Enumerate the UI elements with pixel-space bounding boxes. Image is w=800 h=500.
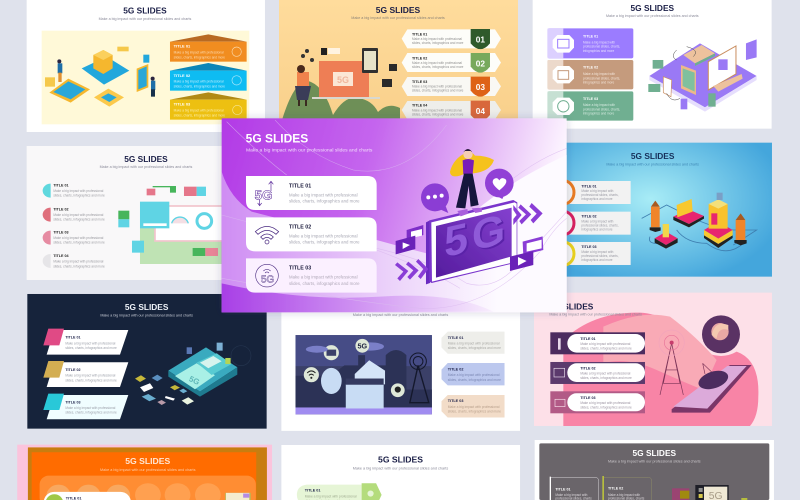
rows: TITLE 02 bbox=[65, 368, 81, 372]
illustration: isometric 5G device: 5G bbox=[187, 374, 201, 387]
heading: 5G SLIDES bbox=[124, 154, 168, 164]
rows: infographics and more bbox=[581, 197, 613, 201]
rows: professional slides, charts, bbox=[581, 193, 619, 197]
rows: Make a big impact with professional bbox=[580, 371, 631, 375]
panel: pink slide right: Make a big impact with our professional slides and charts bbox=[549, 312, 642, 316]
rows: slides, charts, infographics and more bbox=[580, 376, 632, 380]
night scene illustration: 5G bbox=[357, 342, 368, 351]
card: title 03 bbox=[246, 258, 377, 293]
rows: Make a big impact with bbox=[583, 72, 615, 76]
rows: infographics and more bbox=[581, 258, 613, 262]
card: title 01 bbox=[246, 176, 377, 210]
rows: slides, charts, infographics and more bbox=[65, 378, 117, 382]
rows: TITLE 03 bbox=[581, 245, 597, 249]
rows: TITLE 03 bbox=[583, 97, 598, 101]
icon: video player right bbox=[510, 236, 543, 271]
icon: 5G antenna: 5G bbox=[255, 188, 272, 203]
rows: Make a big impact with professional bbox=[65, 406, 116, 410]
rows: professional slides, charts, bbox=[581, 254, 619, 258]
illustration: isometric laptop bbox=[648, 39, 757, 112]
rows: TITLE 03 bbox=[448, 399, 463, 403]
row: TITLE 01 bbox=[305, 488, 320, 492]
card: title 03: Make a big impact with professional bbox=[289, 274, 358, 279]
hills bbox=[282, 81, 400, 120]
rows: slides, charts, infographics and more bbox=[412, 113, 464, 117]
heading: SLIDES bbox=[563, 302, 594, 312]
panel: dark slide left bbox=[27, 294, 267, 429]
rows: Make a big impact with bbox=[608, 493, 640, 497]
rows: Make a big impact with professional bbox=[448, 341, 500, 345]
panel: pink slide right bbox=[534, 293, 772, 426]
illustration: isometric city bbox=[642, 193, 757, 251]
rows: Make a big impact with professional bbox=[580, 342, 631, 346]
rows: Make a big impact with professional bbox=[412, 61, 462, 65]
rows: Make a big impact with bbox=[583, 40, 615, 44]
panel: grey slide bottom right bbox=[535, 440, 774, 500]
illustration: tablet 5G bbox=[672, 485, 747, 500]
arrow cards: TITLE 02 bbox=[174, 73, 191, 78]
panel: orange slide bottom left: Make a big impact with our professional slides and charts bbox=[100, 468, 196, 472]
lower swoosh bbox=[222, 155, 567, 312]
rows: Make a big impact with professional bbox=[448, 373, 500, 377]
rows bbox=[550, 332, 645, 413]
rows: TITLE 02 bbox=[53, 208, 69, 212]
rows: Make a big impact with professional bbox=[580, 401, 631, 405]
icon: wifi bbox=[255, 226, 279, 244]
rows: Make a big impact with professional bbox=[412, 109, 462, 113]
panel: white slide middle left: Make a big impact with our professional slides and charts bbox=[100, 165, 192, 169]
arrow cards: Make a big impact with professional bbox=[174, 50, 224, 54]
arrow cards: Make a big impact with professional bbox=[174, 109, 224, 113]
rows: slides, charts, infographics and more bbox=[412, 89, 464, 93]
icon: video player left bbox=[396, 225, 423, 254]
rows: infographics and more bbox=[583, 112, 614, 116]
rows: slides, charts, infographics and more bbox=[65, 411, 117, 415]
rows: TITLE 02 bbox=[448, 368, 463, 372]
rows bbox=[442, 332, 505, 417]
card: title 03: slides, charts, infographics and more bbox=[289, 281, 360, 286]
rows: TITLE 04 bbox=[412, 104, 428, 108]
rows: TITLE 02 bbox=[608, 487, 623, 491]
heading: 5G SLIDES bbox=[631, 3, 674, 13]
rows: TITLE 01 bbox=[555, 487, 571, 491]
arrow cards: TITLE 03 bbox=[174, 102, 191, 107]
laptop illustration: 5G bbox=[337, 75, 349, 85]
rows: professional slides, charts, bbox=[581, 223, 619, 227]
row: Make a big impact with professional bbox=[305, 494, 357, 498]
arrow cards: TITLE 01 bbox=[174, 44, 191, 49]
rows: Make a big impact with professional bbox=[65, 341, 116, 345]
rows bbox=[43, 184, 105, 268]
rows: infographics and more bbox=[583, 81, 614, 85]
rows bbox=[43, 329, 128, 419]
heading: 5G SLIDES bbox=[631, 151, 675, 161]
rows: slides, charts, infographics and more bbox=[448, 378, 501, 382]
rows: TITLE 02 bbox=[583, 66, 598, 70]
rows: Make a big impact with bbox=[583, 103, 615, 107]
card: title 01: TITLE 01 bbox=[289, 183, 311, 189]
rows: slides, charts, infographics and more bbox=[412, 65, 464, 69]
rows bbox=[402, 29, 501, 121]
rows: Make a big impact with professional bbox=[53, 189, 104, 193]
rows: slides, charts, infographics and more bbox=[53, 264, 105, 268]
panel: grey slide bottom right: Make a big impact with our professional slides and charts bbox=[608, 459, 701, 463]
rows: slides, charts, infographics and more bbox=[580, 405, 632, 409]
rows: TITLE 03 bbox=[580, 396, 596, 400]
blob bbox=[563, 313, 758, 426]
rows: professional slides, charts, bbox=[583, 76, 620, 80]
rows: 03 bbox=[476, 82, 485, 92]
laptop illustration bbox=[295, 48, 397, 106]
illustration: 5G tablet: 5G bbox=[444, 205, 509, 267]
illustration: isometric blocks bbox=[45, 47, 155, 107]
panel: blue slide right bbox=[563, 143, 772, 277]
rows: TITLE 04 bbox=[53, 254, 70, 258]
card: title 02: Make a big impact with professional bbox=[289, 233, 358, 238]
arrows: chevrons left bbox=[395, 259, 428, 281]
arrow cards: slides, charts, infographics and more bbox=[174, 113, 225, 117]
panel: peach slide top centre: Make a big impact with our professional slides and charts bbox=[351, 16, 445, 20]
heading: 5G SLIDES bbox=[125, 456, 170, 466]
rows: infographics and more bbox=[581, 227, 613, 231]
panel: white slide top right bbox=[533, 0, 772, 129]
rows: Make a big impact with professional bbox=[53, 213, 104, 217]
rows: TITLE 02 bbox=[412, 56, 427, 60]
rows: slides, charts, infographics and more bbox=[448, 410, 501, 414]
card: title 03: TITLE 03 bbox=[289, 266, 311, 272]
rows: 04 bbox=[476, 106, 485, 116]
rows: TITLE 03 bbox=[65, 400, 81, 404]
panel: night-scene slide bbox=[281, 300, 520, 431]
rows: slides, charts, infographics and more bbox=[448, 346, 501, 350]
panel: blue slide right: Make a big impact with our professional slides and charts bbox=[606, 162, 699, 166]
rows: Make a big impact with professional bbox=[448, 405, 500, 409]
card: title 02: TITLE 02 bbox=[289, 225, 311, 231]
hero heading: 5G SLIDES bbox=[246, 132, 308, 146]
rows: slides, charts, infographics and more bbox=[412, 41, 464, 45]
rows: Make a big impact with professional bbox=[53, 236, 104, 240]
arrow cards bbox=[170, 34, 247, 120]
rows: Make a big impact with bbox=[581, 219, 614, 223]
rows: Make a big impact with bbox=[581, 189, 614, 193]
rows: TITLE 01 bbox=[583, 34, 598, 38]
illustration: isometric 5G device bbox=[135, 343, 251, 405]
rows: Make a big impact with professional bbox=[412, 85, 462, 89]
rows bbox=[550, 476, 652, 500]
panel: white slide bottom centre bbox=[281, 445, 520, 500]
label: 5G: 5G bbox=[446, 206, 511, 268]
rows bbox=[563, 181, 631, 265]
night scene illustration bbox=[295, 335, 432, 414]
rows: slides, charts, infographics and more bbox=[580, 347, 632, 351]
panel: hero purple slide bbox=[222, 118, 567, 312]
panel: yellow slide top left bbox=[27, 0, 265, 132]
card: title 02: slides, charts, infographics and more bbox=[289, 240, 360, 245]
icon: speech bubble dots bbox=[421, 183, 449, 213]
arrow cards: slides, charts, infographics and more bbox=[174, 84, 225, 88]
heading: 5G SLIDES bbox=[123, 6, 167, 16]
illustration: tower and phone bbox=[659, 315, 752, 413]
arrow cards: Make a big impact with professional bbox=[174, 80, 224, 84]
rows: TITLE 01 bbox=[580, 337, 596, 341]
panel: yellow slide top left: Make a big impact with our professional slides and charts bbox=[99, 17, 191, 21]
row bbox=[297, 483, 431, 500]
rows: slides, charts, infographics and more bbox=[65, 346, 117, 350]
rows: TITLE 03 bbox=[53, 231, 69, 235]
panel: white slide bottom centre: Make a big impact with our professional slides and charts bbox=[353, 466, 448, 470]
icon: heart bubble bbox=[485, 169, 514, 199]
card: title 01: Make a big impact with professional bbox=[289, 192, 358, 197]
rows bbox=[548, 28, 633, 121]
arrows: chevrons right bbox=[513, 203, 543, 225]
panel: peach slide top centre bbox=[279, 0, 518, 130]
card: title 01: slides, charts, infographics and more bbox=[289, 199, 360, 204]
heading: 5G SLIDES bbox=[125, 302, 169, 312]
row bbox=[44, 492, 131, 500]
panel: dark slide left: Make a big impact with our professional slides and charts bbox=[100, 313, 193, 317]
rows: professional slides, charts, bbox=[583, 45, 620, 49]
rows: TITLE 01 bbox=[412, 32, 427, 36]
panel: orange slide bottom left bbox=[17, 445, 272, 500]
rows: TITLE 01 bbox=[581, 184, 597, 188]
rows: Make a big impact with professional bbox=[412, 37, 462, 41]
rows: TITLE 01 bbox=[53, 184, 69, 188]
icon: 5G circle: 5G bbox=[261, 275, 275, 286]
rows: slides, charts, infographics and more bbox=[53, 193, 105, 197]
card: title 02 bbox=[246, 217, 377, 251]
arrow cards: slides, charts, infographics and more bbox=[174, 55, 225, 59]
rows: TITLE 03 bbox=[412, 80, 427, 84]
heading: 5G SLIDES bbox=[376, 5, 421, 15]
rows: Make a big impact with professional bbox=[65, 374, 116, 378]
rows: 02 bbox=[476, 58, 485, 68]
rows: slides, charts, infographics and more bbox=[53, 217, 105, 221]
rows: TITLE 01 bbox=[448, 336, 463, 340]
panel: white slide middle left bbox=[27, 146, 227, 280]
rows: Make a big impact with bbox=[581, 250, 614, 254]
heading: 5G SLIDES bbox=[633, 448, 677, 458]
rows: Make a big impact with professional bbox=[53, 260, 104, 264]
rows: slides, charts, infographics and more bbox=[53, 241, 105, 245]
hero subtitle: Make a big impact with our professional slides and charts bbox=[246, 148, 373, 154]
illustration: 5G tablet bbox=[426, 200, 517, 284]
illustration: router dashboard bbox=[118, 186, 223, 264]
rows: Make a big impact with bbox=[555, 493, 588, 497]
rows: professional slides, charts, bbox=[583, 107, 620, 111]
panel: night-scene slide: Make a big impact with our professional slides and charts bbox=[353, 313, 448, 317]
rows: TITLE 02 bbox=[581, 215, 597, 219]
illustration: woman bbox=[450, 149, 494, 216]
rows: infographics and more bbox=[583, 49, 614, 53]
panel: white slide top right: Make a big impact with our professional slides and charts bbox=[606, 14, 699, 18]
rows: 01 bbox=[476, 34, 485, 44]
heading: 5G SLIDES bbox=[378, 455, 423, 465]
rows: TITLE 01 bbox=[65, 336, 81, 340]
rows: TITLE 02 bbox=[580, 366, 596, 370]
